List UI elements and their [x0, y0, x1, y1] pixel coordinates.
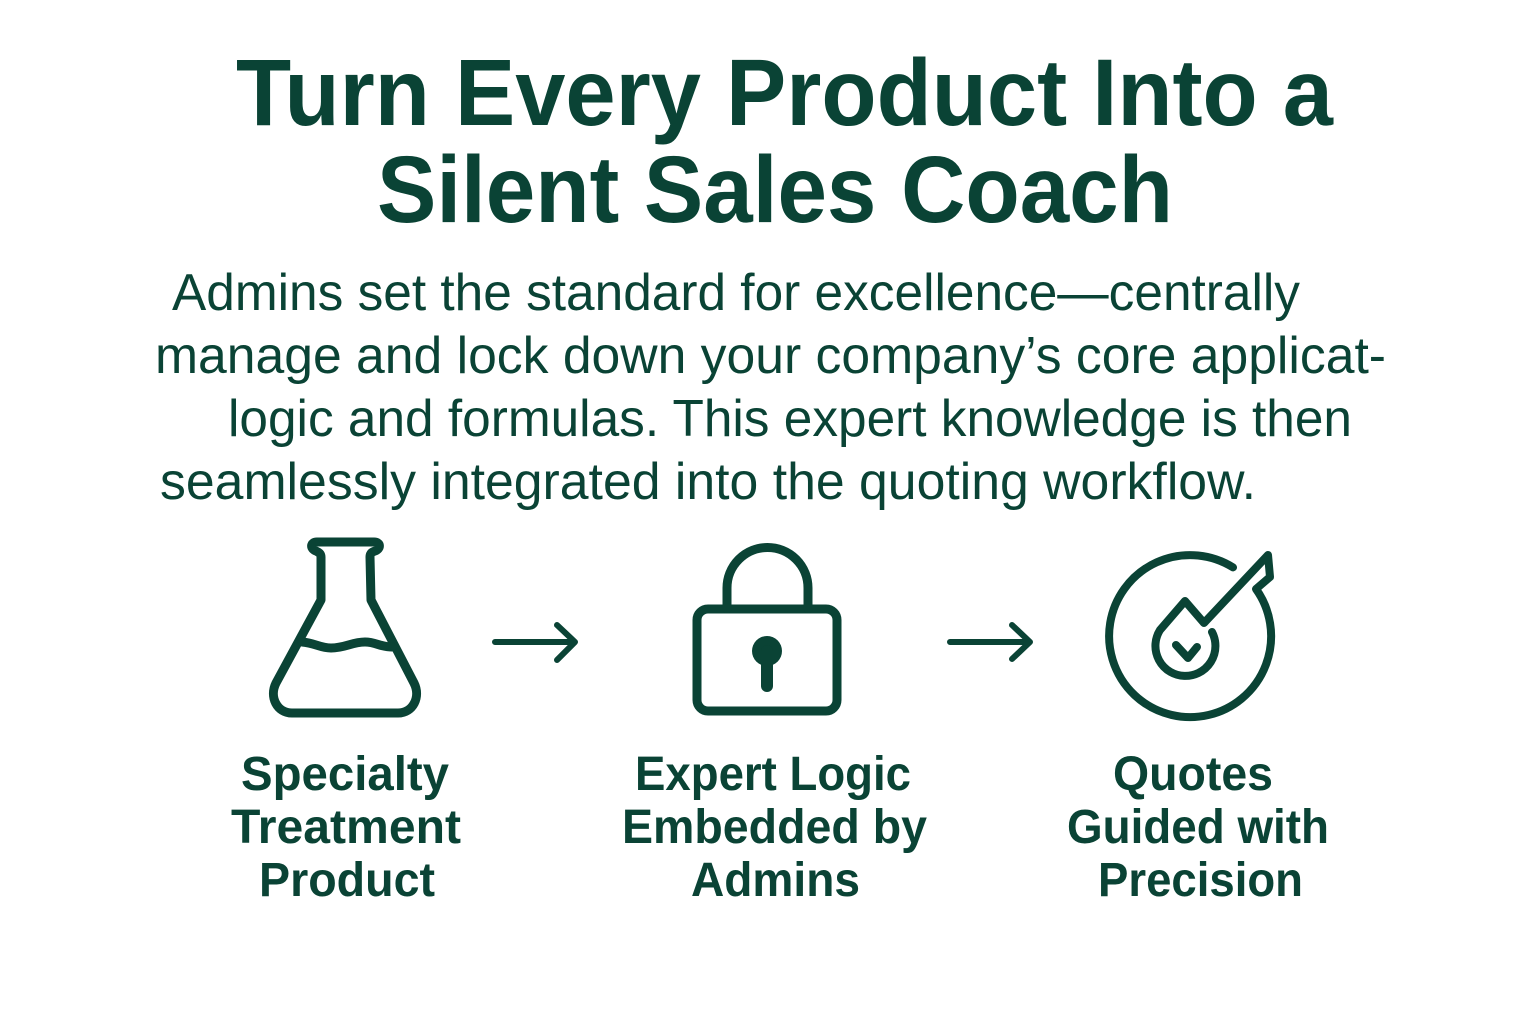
- label: quotes guided with precision: Quotes: [1113, 748, 1273, 801]
- intro text block: logic and formulas. This expert knowledge is then: [228, 390, 1352, 448]
- label: expert logic embedded by admins: Expert Logic: [635, 748, 911, 801]
- title: Silent Sales Coach: [377, 137, 1173, 243]
- intro text block: [155, 264, 1386, 511]
- label: specialty treatment product: Product: [259, 854, 435, 907]
- icon: target with check and drop: [1109, 555, 1271, 717]
- intro text block: manage and lock down your company’s core applicat-: [155, 327, 1386, 385]
- label: quotes guided with precision: [1067, 748, 1329, 907]
- title: Turn Every Product Into a: [236, 40, 1334, 146]
- icon: flask: [273, 542, 417, 713]
- label: quotes guided with precision: Precision: [1098, 854, 1303, 907]
- arrow: step one to step two: [495, 625, 575, 660]
- intro text block: seamlessly integrated into the quoting workflow.: [160, 453, 1256, 511]
- icon: padlock: [697, 548, 837, 711]
- arrow: step two to step three: [950, 625, 1030, 659]
- label: specialty treatment product: Treatment: [231, 801, 461, 854]
- label: expert logic embedded by admins: Admins: [691, 854, 860, 907]
- label: quotes guided with precision: Guided with: [1067, 801, 1329, 854]
- intro text block: Admins set the standard for excellence—centrally: [172, 264, 1300, 322]
- label: expert logic embedded by admins: [622, 748, 927, 907]
- label: expert logic embedded by admins: Embedded by: [622, 801, 927, 854]
- title: [236, 40, 1334, 243]
- label: specialty treatment product: [231, 748, 461, 907]
- label: specialty treatment product: Specialty: [241, 748, 449, 801]
